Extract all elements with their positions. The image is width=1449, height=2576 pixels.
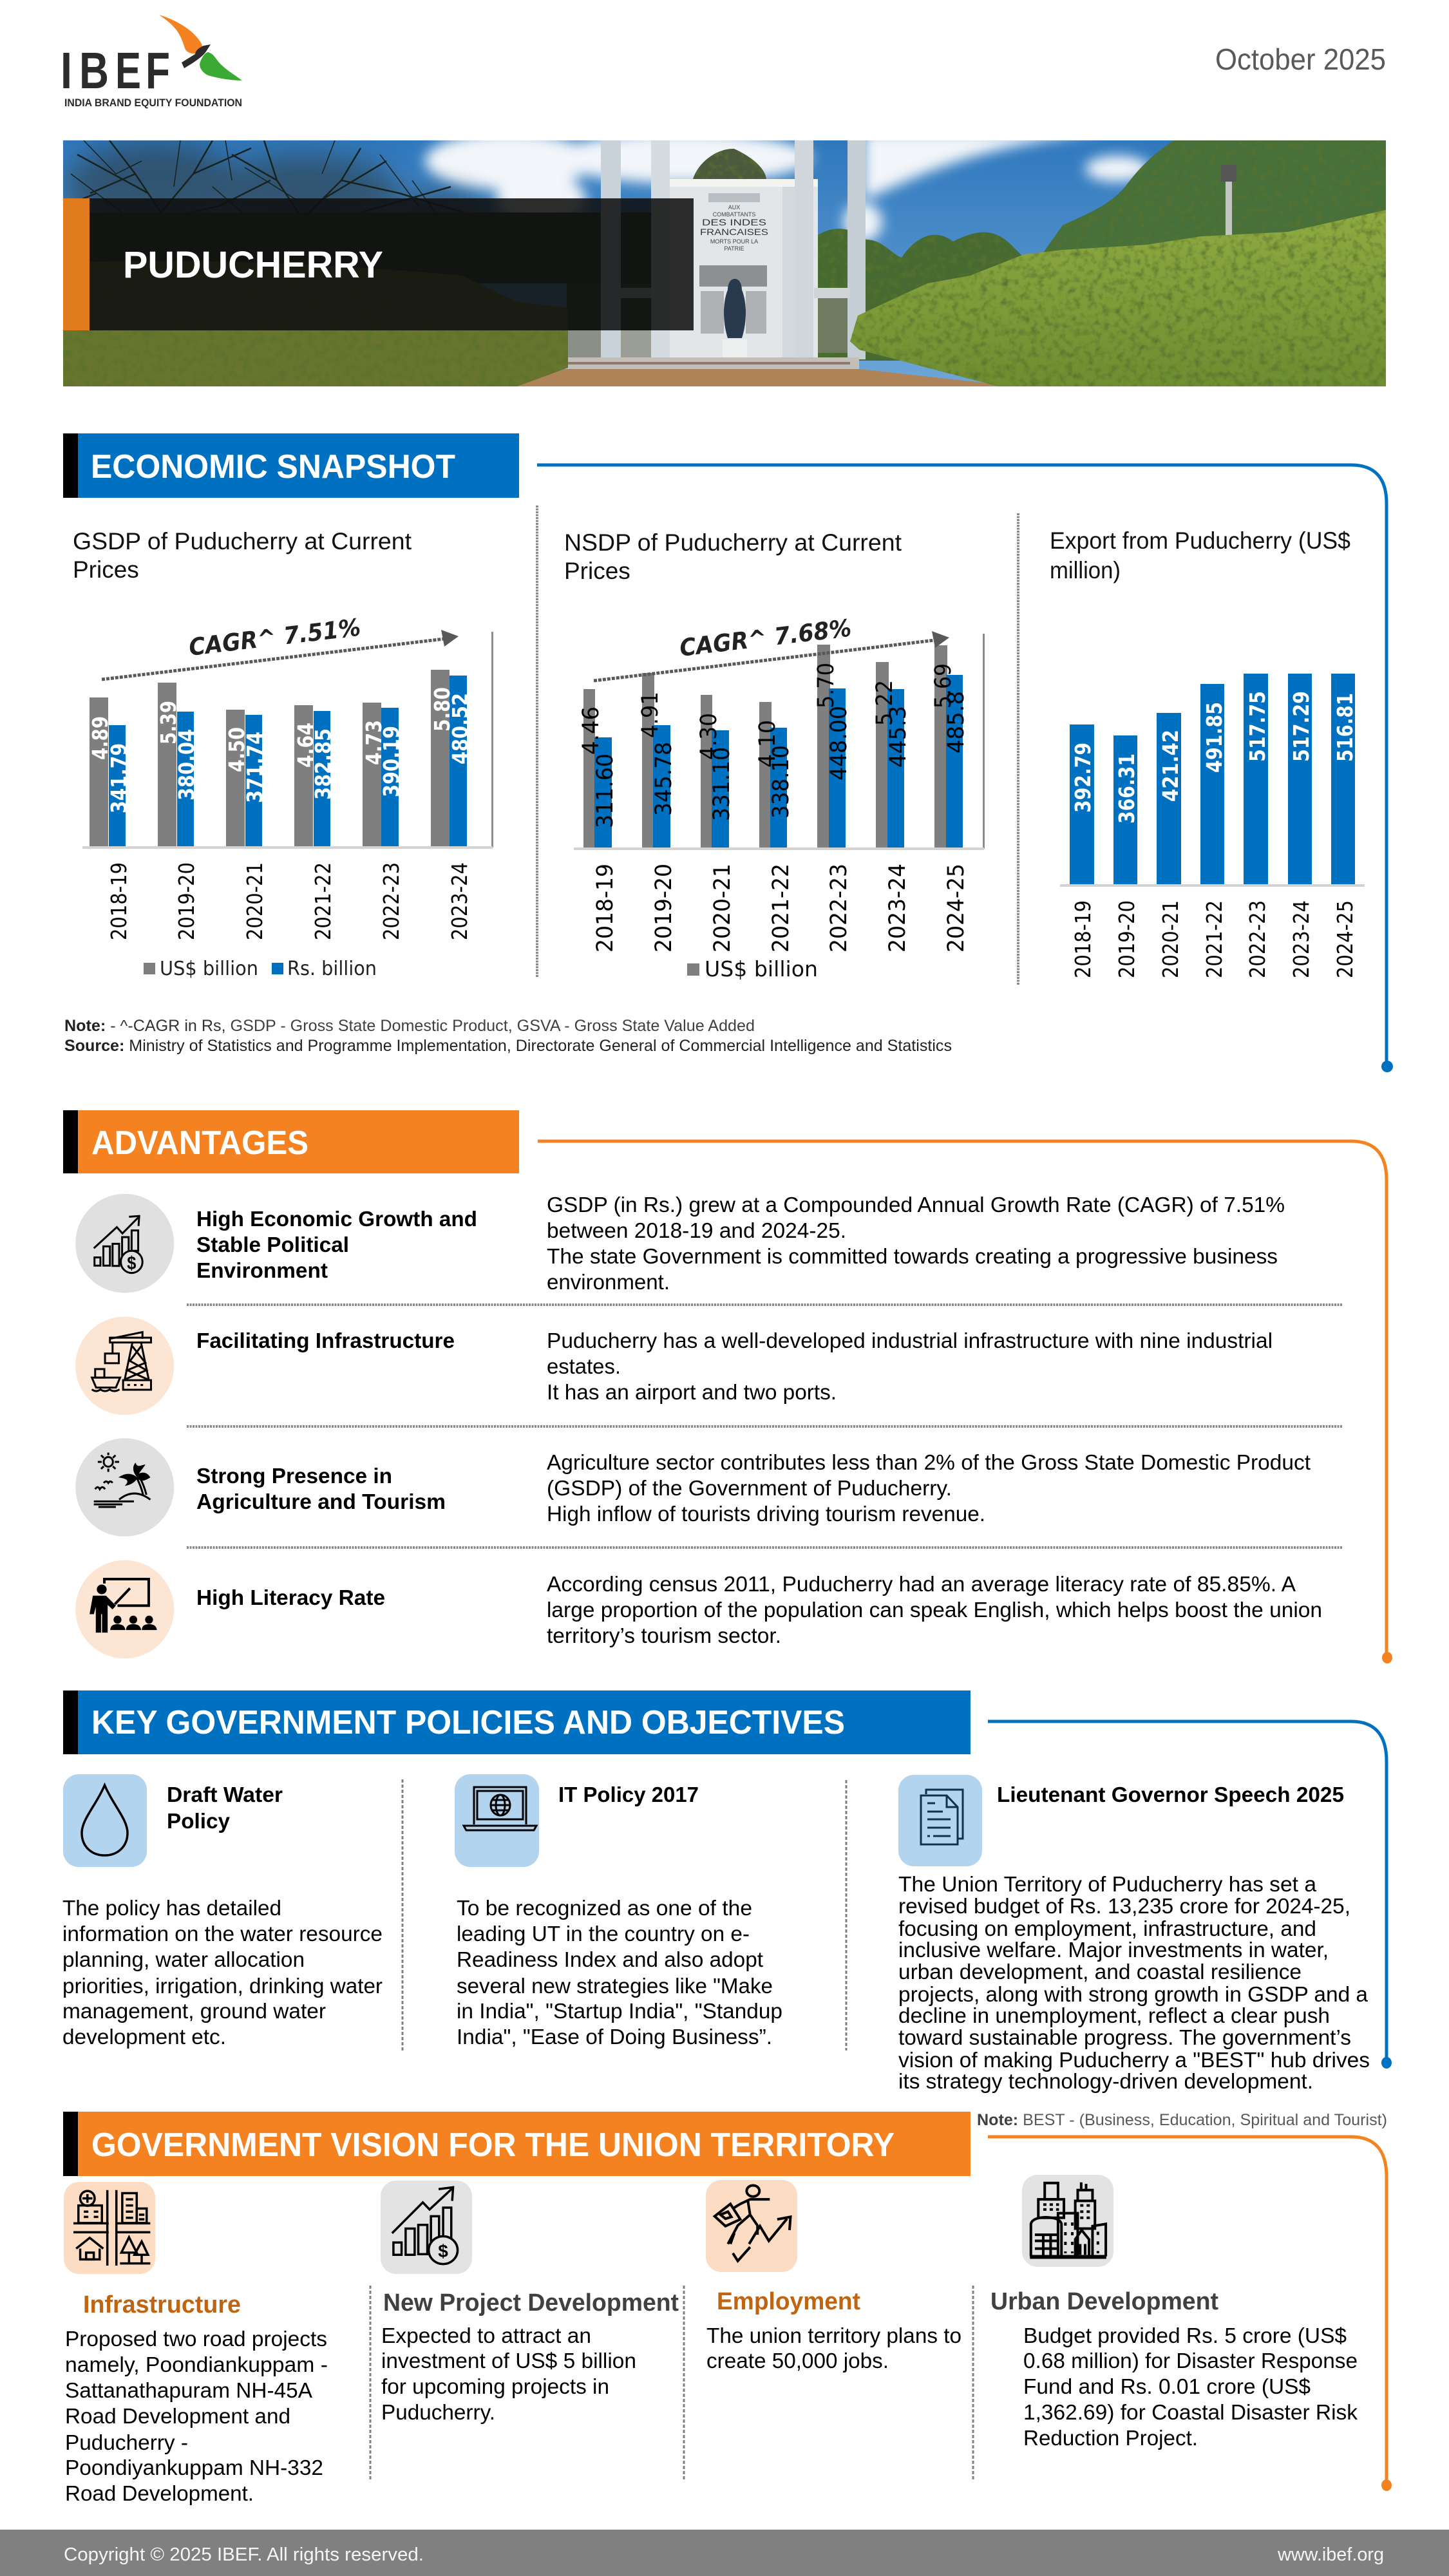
chart: GSDP: [73, 528, 493, 980]
description: namely, Poondiankuppam -: [65, 2353, 328, 2376]
logo wordmark: I: [61, 42, 72, 99]
value labels: 338.10: [768, 745, 794, 819]
description: The policy has detailed: [62, 1896, 281, 1920]
CAGR arrow: [594, 614, 949, 681]
logo wing: green: [200, 52, 242, 80]
year labels: 2020-21: [1158, 900, 1183, 978]
divider: [1017, 513, 1019, 985]
icon: crane and ship: [75, 1316, 174, 1415]
heading: Employment: [717, 2288, 860, 2315]
title: Agriculture and Tourism: [196, 1490, 446, 1513]
monument inscription: COMBATTANTS: [713, 211, 755, 218]
year labels: 2021-22: [768, 864, 794, 952]
description: The state Government is committed towards creating a progressive business: [547, 1244, 1278, 1268]
monument inscription: DES INDES: [702, 217, 766, 227]
title: Facilitating Infrastructure: [196, 1329, 455, 1352]
value labels: 4.91: [638, 692, 663, 738]
title: Draft Water: [167, 1783, 283, 1806]
description: GSDP (in Rs.) grew at a Compounded Annual Growth Rate (CAGR) of 7.51%: [547, 1193, 1285, 1217]
bars: exports: [1070, 674, 1355, 884]
value labels: 341.79: [106, 743, 131, 813]
description: High inflow of tourists driving tourism revenue.: [547, 1502, 985, 1526]
year labels: [1070, 900, 1358, 978]
year labels: 2023-24: [1289, 900, 1314, 978]
icon: water drop: [63, 1774, 147, 1867]
value labels: 485.8: [943, 691, 969, 753]
steps: [559, 357, 859, 369]
connector: advantages: [538, 1141, 1392, 1663]
clouds: [425, 132, 1150, 242]
value labels: 371.74: [242, 732, 267, 803]
value labels: 4.73: [361, 720, 386, 765]
note and source: Note: - ^-CAGR in Rs, GSDP - Gross State Domestic Product, GSVA - Gross State Value Added: [64, 1017, 755, 1035]
value labels: 517.29: [1289, 691, 1314, 762]
description: Fund and Rs. 0.01 crore (US$: [1023, 2374, 1311, 2398]
value labels: 4.10: [755, 720, 781, 768]
description: Expected to attract an: [381, 2324, 591, 2347]
description: Readiness Index and also adopt: [457, 1947, 763, 1971]
icon: laptop with globe: [455, 1774, 539, 1867]
value labels: 5.69: [931, 663, 956, 708]
chart title: Prices: [73, 556, 139, 583]
heading: Urban Development: [990, 2288, 1218, 2315]
section heading: economic snapshot: [63, 433, 519, 498]
description: inclusive welfare. Major investments in water,: [898, 1938, 1329, 1962]
description: Budget provided Rs. 5 crore (US$: [1023, 2324, 1347, 2347]
title: Environment: [196, 1258, 328, 1282]
legend: US$ billion: [705, 956, 818, 981]
icon: city grid: [64, 2182, 155, 2274]
description: Proposed two road projects: [65, 2327, 327, 2351]
description: The Union Territory of Puducherry has set a: [898, 1872, 1317, 1896]
website: www.ibef.org: [1277, 2544, 1384, 2565]
advantage 1: high economic growth: [75, 1193, 1285, 1294]
description: environment.: [547, 1270, 670, 1294]
value labels: [578, 663, 969, 828]
year labels: 2021-22: [1202, 900, 1227, 978]
advantage 4: high literacy rate: [75, 1560, 1322, 1658]
value labels: 5.39: [156, 701, 181, 744]
title: Lieutenant Governor Speech 2025: [997, 1783, 1344, 1806]
description: urban development, and coastal resilience: [898, 1960, 1302, 1984]
value labels: 4.50: [224, 727, 249, 772]
chart title: Prices: [564, 558, 630, 584]
description: India", "Ease of Doing Business”.: [457, 2025, 772, 2049]
year labels: 2024-25: [1332, 900, 1358, 978]
section heading: government vision: GOVERNMENT VISION FOR THE UNION TERRITORY: [91, 2126, 895, 2164]
statue: [724, 279, 746, 338]
gravel ground: [499, 369, 1016, 386]
description: vision of making Puducherry a "BEST" hub drives: [898, 2048, 1370, 2072]
icon: growth chart: [381, 2181, 472, 2274]
bars: Rs. billion: [594, 675, 963, 848]
heading: Infrastructure: [83, 2291, 241, 2318]
value labels: 331.10: [709, 747, 735, 821]
logo tagline: INDIA BRAND EQUITY FOUNDATION: [64, 97, 242, 109]
chart: NSDP: [564, 529, 985, 981]
legend: [144, 958, 377, 980]
description: create 50,000 jobs.: [706, 2349, 889, 2372]
description: According census 2011, Puducherry had an average literacy rate of 85.85%. A: [547, 1572, 1296, 1596]
description: Puducherry has a well-developed industrial infrastructure with nine industrial: [547, 1329, 1273, 1352]
description: between 2018-19 and 2024-25.: [547, 1218, 846, 1242]
description: for upcoming projects in: [381, 2374, 609, 2398]
description: 0.68 million) for Disaster Response: [1023, 2349, 1358, 2372]
icon: teacher and audience: [75, 1560, 174, 1658]
description: Road Development.: [65, 2481, 254, 2505]
value labels: 421.42: [1158, 730, 1183, 802]
page title: PUDUCHERRY: [123, 244, 383, 286]
description: Reduction Project.: [1023, 2426, 1198, 2450]
year labels: 2018-19: [106, 862, 131, 940]
bars: US$ billion: [583, 645, 947, 848]
chart title: million): [1050, 557, 1121, 583]
monument inscription: AUX: [728, 204, 740, 211]
description: revised budget of Rs. 13,235 crore for 2024-25,: [898, 1894, 1350, 1918]
description: Poondiyankuppam NH-332: [65, 2456, 323, 2479]
value labels: 445.3: [886, 706, 911, 768]
year labels: 2018-19: [1070, 900, 1095, 978]
year labels: 2024-25: [943, 864, 969, 952]
year labels: 2022-23: [1245, 900, 1270, 978]
year labels: [592, 864, 969, 952]
copyright: Copyright © 2025 IBEF. All rights reserved.: [64, 2544, 424, 2565]
policy: draft water policy: [62, 1774, 383, 2049]
hero photo banner: [63, 132, 1386, 386]
vision: urban development: [990, 2175, 1358, 2450]
policy: IT policy 2017: [455, 1774, 782, 2049]
value labels: 491.85: [1202, 702, 1227, 773]
year labels: [106, 862, 472, 940]
vision: new project development: [381, 2181, 679, 2424]
value labels: 345.78: [651, 742, 677, 816]
year labels: 2019-20: [651, 864, 677, 952]
icon: document: [898, 1775, 982, 1866]
icon: growth chart: $: [438, 2241, 448, 2261]
CAGR arrow: CAGR^ 7.51%: [187, 614, 362, 661]
value labels: 380.04: [174, 729, 199, 800]
value labels: 4.89: [88, 716, 113, 760]
value labels: 5.70: [813, 663, 839, 708]
legend: US$ billion: [160, 958, 258, 980]
description: It has an airport and two ports.: [547, 1380, 837, 1404]
lamp post: [1226, 182, 1232, 235]
description: investment of US$ 5 billion: [381, 2349, 636, 2372]
description: large proportion of the population can speak English, which helps boost the union: [547, 1598, 1322, 1622]
bars: Rs. billion: [109, 676, 467, 846]
connector: policies: [988, 1721, 1392, 2069]
divider: [536, 506, 538, 977]
year labels: 2020-21: [710, 864, 735, 952]
description: toward sustainable progress. The government’s: [898, 2025, 1351, 2049]
policy: lieutenant governor speech: [898, 1775, 1370, 2093]
value labels: 392.79: [1070, 743, 1095, 813]
year labels: 2022-23: [826, 864, 852, 952]
icon: skyline: [1022, 2175, 1113, 2267]
year labels: 2019-20: [174, 862, 199, 940]
value labels: 4.30: [696, 713, 722, 760]
title: High Economic Growth and: [196, 1207, 477, 1231]
date: October 2025: [1215, 43, 1386, 76]
bars: US$ billion: [90, 670, 450, 846]
description: its strategy technology-driven development.: [898, 2069, 1313, 2093]
year labels: 2018-19: [592, 864, 618, 952]
bare tree haze: [63, 140, 491, 213]
description: leading UT in the country on e-: [457, 1922, 750, 1946]
description: several new strategies like "Make: [457, 1974, 773, 1998]
tree behind the monument: [693, 149, 766, 179]
description: Sattanathapuram NH-45A: [65, 2378, 312, 2402]
left hedge: [63, 283, 568, 386]
logo wordmark: F: [146, 42, 170, 99]
monument pillars and wall: [670, 179, 818, 357]
year labels: 2019-20: [1114, 900, 1139, 978]
right bush: [850, 210, 1386, 386]
description: Agriculture sector contributes less than 2% of the Gross State Domestic Product: [547, 1450, 1311, 1474]
value labels: 5.22: [872, 680, 898, 726]
title: Strong Presence in: [196, 1464, 392, 1488]
description: focusing on employment, infrastructure, and: [898, 1917, 1316, 1940]
description: priorities, irrigation, drinking water: [62, 1974, 383, 1998]
value labels: 382.85: [310, 728, 336, 800]
description: planning, water allocation: [62, 1947, 305, 1971]
legend: Rs. billion: [287, 958, 377, 980]
icon: growth chart: [75, 1194, 174, 1293]
CAGR arrow: [102, 614, 459, 679]
description: Puducherry.: [381, 2400, 495, 2424]
year labels: 2023-24: [885, 864, 911, 952]
chart title: NSDP of Puducherry at Current: [564, 529, 902, 556]
icon: running businessperson: [706, 2180, 797, 2272]
title: Stable Political: [196, 1233, 349, 1256]
monument inscription: MORTS POUR LA: [710, 238, 758, 245]
connector: vision: [988, 2137, 1392, 2491]
section heading: advantages: [63, 1110, 519, 1173]
value labels: 366.31: [1114, 753, 1139, 824]
value labels: 4.46: [578, 706, 604, 755]
monument inscription: FRANCAISES: [700, 227, 768, 237]
note: BEST: Note: BEST - (Business, Education, Spiritual and Tourist): [977, 2111, 1387, 2129]
value labels: 517.75: [1245, 691, 1270, 762]
value labels: 516.81: [1332, 693, 1358, 762]
description: 1,362.69) for Coastal Disaster Risk: [1023, 2400, 1358, 2424]
hero dark overlay: [90, 198, 694, 330]
bare tree branches: [71, 140, 464, 213]
section heading: key government policies: [63, 1690, 971, 1754]
year labels: 2023-24: [447, 862, 472, 940]
year labels: 2022-23: [379, 862, 404, 940]
value labels: 5.80: [430, 687, 455, 732]
description: management, ground water: [62, 1999, 326, 2023]
CAGR arrow: CAGR^ 7.68%: [678, 614, 853, 662]
description: Road Development and: [65, 2404, 290, 2428]
monument inscription: PATRIE: [724, 245, 744, 252]
logo wordmark: B: [79, 42, 109, 99]
description: To be recognized as one of the: [457, 1896, 752, 1920]
description: decline in unemployment, reflect a clear push: [898, 2003, 1330, 2027]
note and source: Source: Ministry of Statistics and Programme Implementation, Directorate General of Commercial Intelligence and Statistics: [64, 1037, 952, 1055]
description: (GSDP) of the Government of Puducherry.: [547, 1476, 952, 1500]
value labels: 4.64: [293, 723, 318, 768]
description: projects, along with strong growth in GSDP and a: [898, 1982, 1368, 2006]
logo wordmark: E: [115, 42, 141, 99]
logo wing: orange: [159, 15, 202, 53]
vision: infrastructure: [64, 2182, 328, 2505]
hero orange accent bar: [63, 198, 90, 330]
description: estates.: [547, 1354, 621, 1378]
footer: [0, 2530, 1449, 2576]
logo bird: [182, 44, 211, 68]
chart: exports: [1050, 527, 1365, 978]
note and source: [64, 1017, 952, 1055]
trees behind the bush: [818, 229, 1021, 361]
value labels: 390.19: [379, 726, 404, 797]
value labels: [88, 687, 473, 813]
section heading: economic snapshot: ECONOMIC SNAPSHOT: [91, 448, 455, 486]
chart title: GSDP of Puducherry at Current: [73, 528, 412, 554]
value labels: 448.00: [826, 706, 852, 781]
description: The union territory plans to: [706, 2324, 961, 2347]
icon: island and sun: [75, 1438, 174, 1537]
vision: employment: [706, 2180, 961, 2372]
advantage 2: facilitating infrastructure: [75, 1316, 1273, 1415]
connector: economic snapshot: [537, 465, 1393, 1072]
icon: growth chart: $: [127, 1253, 136, 1273]
description: information on the water resource: [62, 1922, 383, 1946]
value labels: 480.52: [448, 693, 473, 764]
value labels: [1070, 691, 1358, 824]
heading: New Project Development: [383, 2289, 679, 2316]
description: development etc.: [62, 2025, 226, 2049]
section heading: key government policies: KEY GOVERNMENT POLICIES AND OBJECTIVES: [91, 1704, 845, 1741]
description: Puducherry -: [65, 2430, 188, 2454]
description: in India", "Startup India", "Standup: [457, 1999, 782, 2023]
title: IT Policy 2017: [558, 1783, 699, 1806]
section heading: advantages: ADVANTAGES: [91, 1124, 308, 1162]
section heading: government vision: [63, 2112, 971, 2176]
title: Policy: [167, 1809, 231, 1833]
monument inscription: [700, 204, 768, 252]
logo wordmark: [61, 42, 170, 99]
fence: [568, 330, 601, 357]
chart title: Export from Puducherry (US$: [1050, 527, 1350, 554]
advantage 3: agriculture and tourism: [75, 1438, 1311, 1537]
year labels: 2020-21: [242, 862, 267, 940]
value labels: 311.60: [592, 753, 618, 828]
logo: IBEF: [61, 15, 242, 109]
description: territory’s tourism sector.: [547, 1624, 781, 1647]
title: High Literacy Rate: [196, 1586, 385, 1609]
year labels: 2021-22: [310, 862, 336, 940]
